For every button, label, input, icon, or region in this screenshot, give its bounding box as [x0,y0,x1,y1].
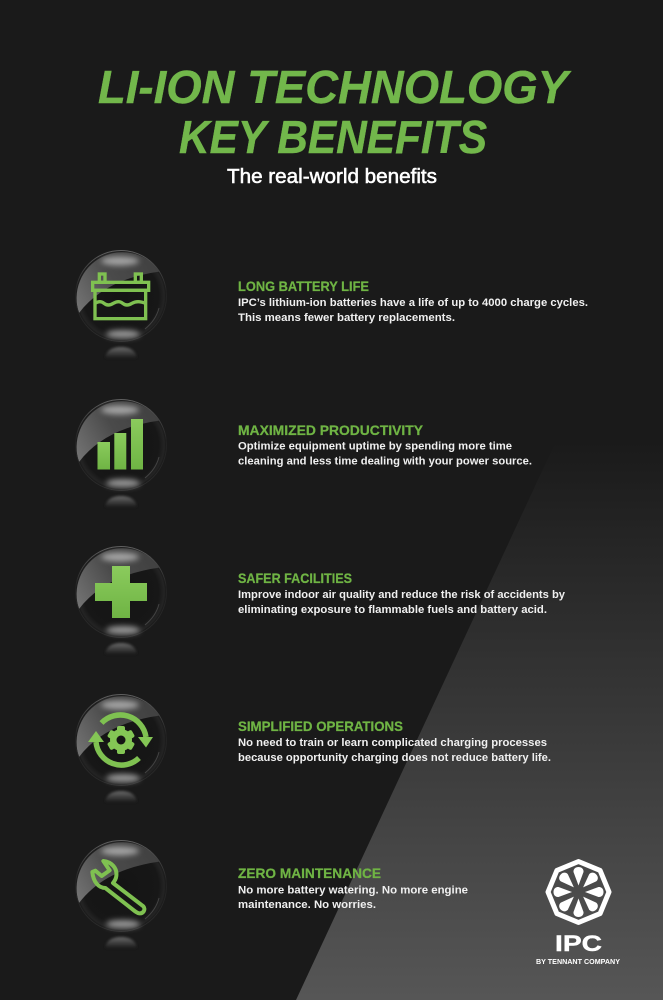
icon: octagon emblem [548,862,609,922]
text: safer facilities: eliminating exposure to flammable fuels and battery acid. [238,604,547,616]
text: zero maintenance: ZERO MAINTENANCE [238,865,381,881]
text: long battery life [238,278,588,324]
panel: zero maintenance [75,840,468,948]
title: KEY BENEFITS [179,111,487,163]
panel: simplified operations [75,694,551,802]
icon: bar chart [75,399,167,507]
text: maximized productivity: Optimize equipment uptime by spending more time [238,440,512,452]
text: maximized productivity: cleaning and less time dealing with your power source. [238,456,532,468]
text: simplified operations: No need to train or learn complicated charging processes [238,737,547,749]
text: simplified operations: because opportunity charging does not reduce battery life. [238,752,551,764]
text: long battery life: IPC’s lithium-ion batteries have a life of up to 4000 charge cycles. [238,297,588,309]
logo wordmark: IPC [555,931,602,956]
icon: plus [75,546,167,654]
title: LI-ION TECHNOLOGY [98,61,572,113]
icon: battery [75,250,167,358]
icon: wrench [75,840,167,948]
text: zero maintenance: maintenance. No worries. [238,899,376,911]
text: safer facilities [238,570,565,616]
panel: safer facilities [75,546,565,654]
text: zero maintenance [238,865,468,911]
text: long battery life: LONG BATTERY LIFE [238,278,369,294]
subtitle: The real-world benefits [227,166,437,188]
text: simplified operations [238,718,551,764]
text: safer facilities: Improve indoor air quality and reduce the risk of accidents by [238,589,565,601]
text: zero maintenance: No more battery watering. No more engine [238,884,468,896]
text: maximized productivity [238,422,532,468]
icon: gear with arrows [75,694,167,802]
text: simplified operations: SIMPLIFIED OPERATIONS [238,718,403,734]
text: long battery life: This means fewer battery replacements. [238,312,455,324]
panel: maximized productivity [75,399,532,507]
title [98,61,572,163]
logo: IPC by Tennant Company [536,862,620,966]
panel: long battery life [75,250,588,358]
text: safer facilities: SAFER FACILITIES [238,570,352,586]
logo tagline: BY TENNANT COMPANY [536,957,620,966]
text: maximized productivity: MAXIMIZED PRODUCTIVITY [238,422,424,438]
